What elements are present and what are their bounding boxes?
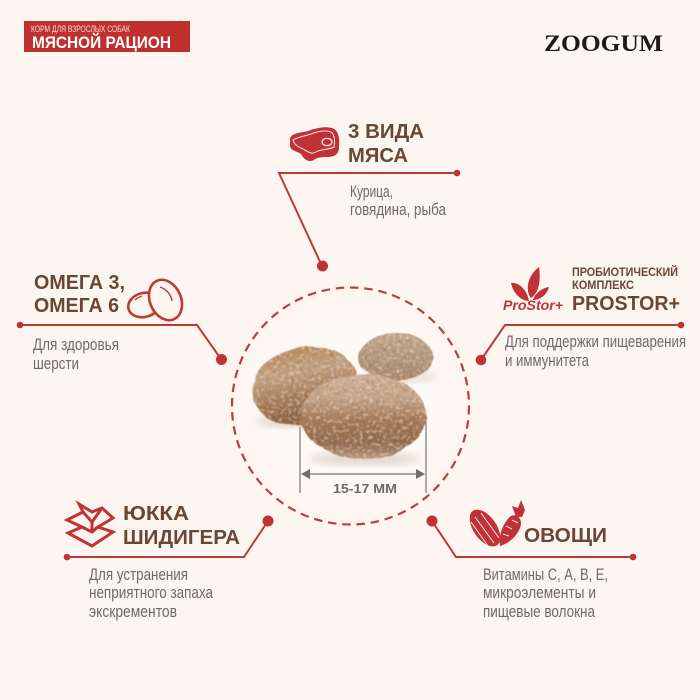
- size dimension: [300, 422, 426, 496]
- panel: yucca: [64, 503, 274, 621]
- description: [505, 332, 686, 370]
- heading: ОВОЩИ: [524, 525, 607, 547]
- heading: [34, 272, 125, 317]
- description: Витамины С, А, В, Е,: [483, 565, 608, 584]
- description: шерсти: [33, 354, 79, 373]
- heading: ОМЕГА 3,: [34, 272, 125, 294]
- banner: [24, 21, 190, 52]
- description: экскрементов: [89, 602, 177, 621]
- heading: 3 ВИДА: [348, 121, 424, 143]
- description: [89, 565, 213, 621]
- size dimension: 15-17 ММ: [333, 481, 397, 496]
- heading: PROSTOR+: [572, 293, 680, 315]
- heading: ШИДИГЕРА: [123, 527, 240, 549]
- icon: yucca leaves: [67, 504, 113, 546]
- description: [33, 335, 119, 373]
- panel: prostor: [476, 266, 686, 370]
- icon: leaves logo: [503, 267, 563, 313]
- kibble: small rear piece: [359, 333, 438, 383]
- heading: ЮККА: [123, 503, 189, 525]
- description: [483, 565, 608, 621]
- heading: [348, 121, 424, 167]
- logo: ZOOGUM: ZOOGUM: [544, 31, 663, 56]
- heading: МЯСА: [348, 145, 408, 167]
- description: микроэлементы и: [483, 583, 596, 602]
- description: пищевые волокна: [483, 602, 595, 621]
- banner: МЯСНОЙ РАЦИОН: [32, 33, 171, 52]
- icon: capsules: [126, 275, 188, 325]
- description: Для устранения: [89, 565, 188, 584]
- description: неприятного запаха: [89, 583, 213, 602]
- description: [350, 182, 446, 219]
- heading: ПРОБИОТИЧЕСКИЙ: [572, 266, 678, 279]
- icon: leaves logo: ProStor+: [503, 297, 563, 313]
- central product circle: [232, 288, 469, 524]
- description: Курица,: [350, 182, 393, 201]
- panel: meat: [279, 121, 460, 272]
- heading: [123, 503, 240, 549]
- description: говядина, рыба: [350, 200, 446, 219]
- description: и иммунитета: [505, 351, 589, 370]
- description: Для здоровья: [33, 335, 119, 354]
- icon: corn and carrot: [464, 500, 525, 552]
- connector: [17, 322, 227, 365]
- panel: omega: [17, 272, 227, 373]
- connector: [426, 516, 636, 560]
- heading: ОМЕГА 6: [34, 295, 119, 317]
- panel: vegetables: [426, 500, 636, 621]
- heading: КОМПЛЕКС: [572, 280, 634, 292]
- connector: [64, 516, 274, 560]
- icon: steak: [290, 127, 339, 161]
- connector: [279, 170, 460, 272]
- connector: [476, 322, 684, 365]
- kibble: left piece: [245, 337, 365, 435]
- banner: КОРМ ДЛЯ ВЗРОСЛЫХ СОБАК: [31, 24, 130, 35]
- heading: [572, 266, 680, 315]
- kibble: front piece: [300, 374, 426, 466]
